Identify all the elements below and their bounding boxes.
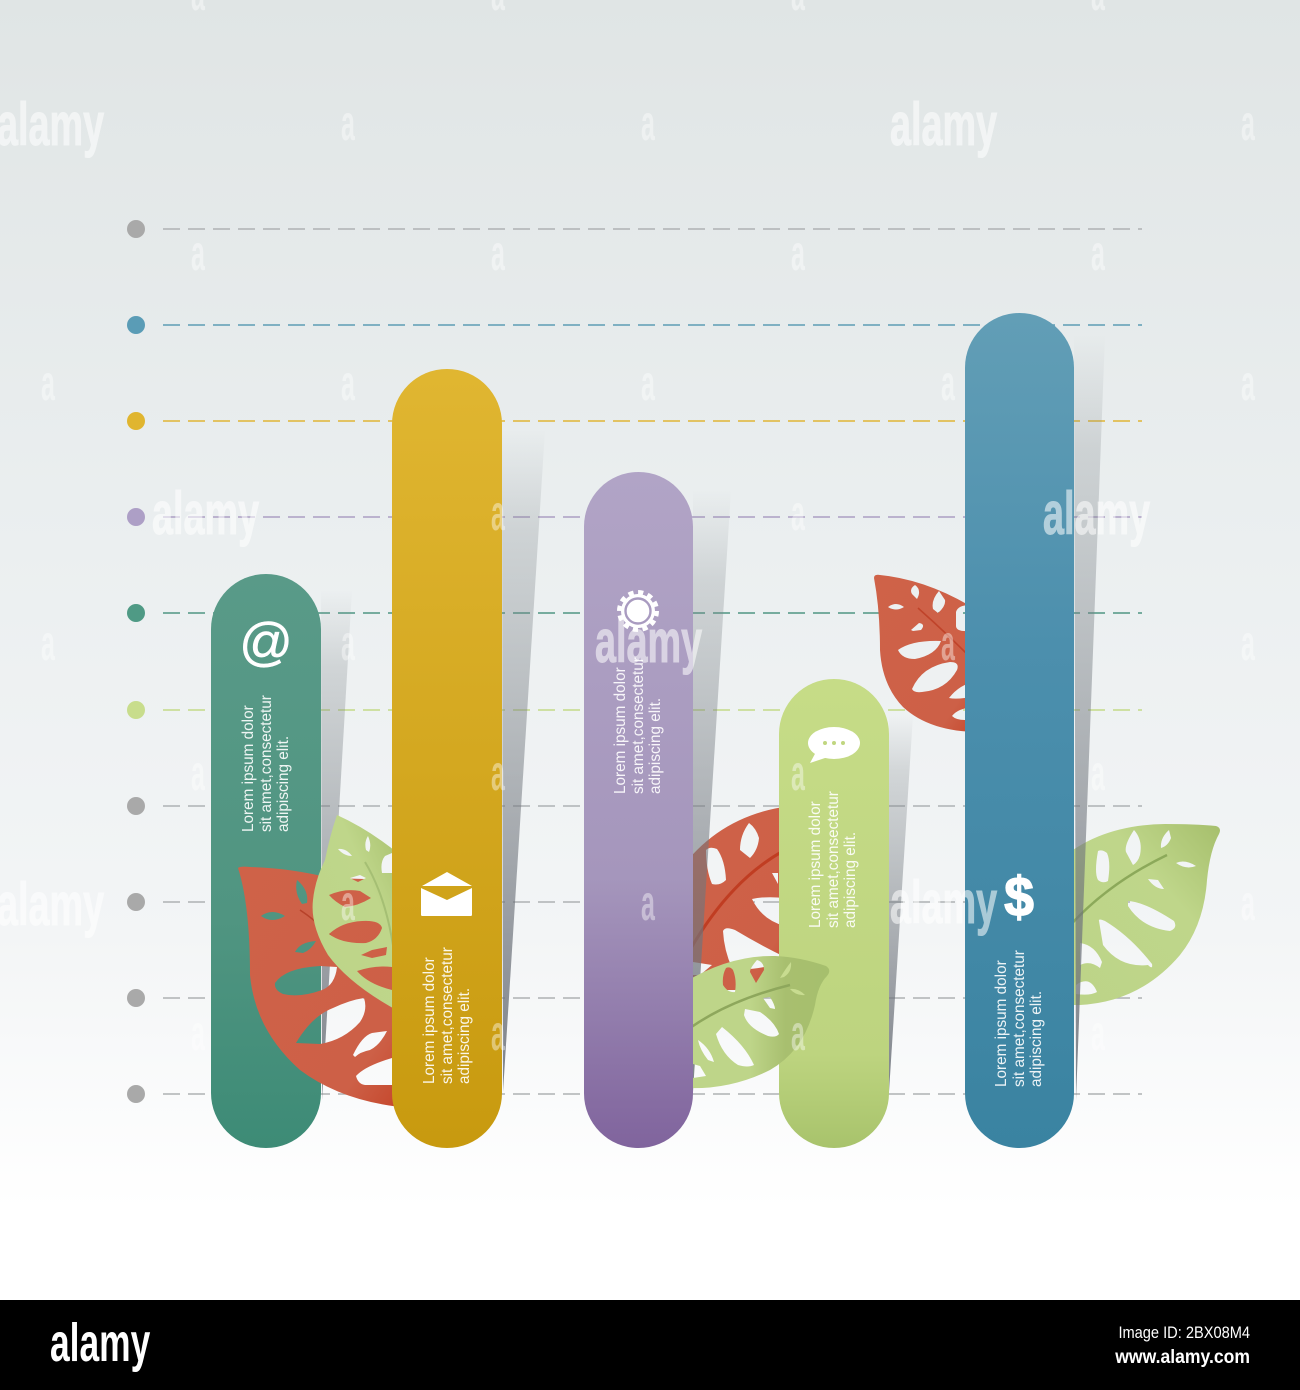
leaf: left red [238,867,400,1107]
text: yellow bar: adipiscing elit. [456,988,473,1084]
watermarks: alamy [152,480,259,547]
footer image id: Image ID: 2BX08M4 [1118,1324,1250,1342]
leaf: centre green [685,956,829,1088]
leaf: right green [1060,824,1220,1005]
leaf: top right red [874,575,980,732]
leaf: left green [313,815,400,1012]
watermarks: alamy [0,91,104,158]
text: yellow bar: sit amet,consectetur [439,947,456,1084]
watermarks: a [941,616,956,671]
text: teal bar [240,695,292,832]
watermarks: a [341,356,356,411]
watermarks: a [791,746,806,801]
watermarks: alamy [0,871,104,938]
bar: yellow [392,369,502,1148]
text: green bar: sit amet,consectetur [825,791,842,928]
text: yellow bar [421,947,473,1084]
watermarks: a [641,96,656,151]
text: teal bar: Lorem ipsum dolor [240,705,257,832]
text: blue bar [993,950,1045,1087]
watermarks: a [1091,746,1106,801]
text: green bar: adipiscing elit. [842,832,859,928]
watermarks: a [41,356,56,411]
text: teal bar: adipiscing elit. [275,736,292,832]
watermarks: a [1091,1006,1106,1061]
watermarks: a [341,876,356,931]
text: blue bar: adipiscing elit. [1028,991,1045,1087]
text: purple bar: Lorem ipsum dolor [612,667,629,794]
watermarks: a [491,486,506,541]
text: purple bar: adipiscing elit. [647,698,664,794]
text: blue bar: Lorem ipsum dolor [993,960,1010,1087]
shadow: yellow bar [502,430,545,1092]
text: green bar: Lorem ipsum dolor [807,801,824,928]
watermarks: a [791,226,806,281]
shadow: purple, green, blue bars [693,335,1105,1100]
watermarks: a [791,486,806,541]
text: yellow bar: Lorem ipsum dolor [421,957,438,1084]
watermarks: a [491,226,506,281]
watermarks [0,0,1256,1061]
bar: blue [965,313,1074,1148]
watermarks: alamy [890,91,997,158]
watermarks: a [1241,616,1256,671]
text: blue bar: sit amet,consectetur [1011,950,1028,1087]
watermarks: a [1241,356,1256,411]
text: green bar [807,791,859,928]
icon: speech bubble [808,727,860,763]
watermarks: a [1241,96,1256,151]
bar: purple [584,472,693,1148]
icon: gear [620,593,656,629]
watermarks: a [641,356,656,411]
watermarks: alamy [890,869,997,936]
icon: at sign: @ [239,613,293,672]
icon: envelope [421,872,472,916]
bar: light green [779,679,889,1148]
text: purple bar [612,657,664,794]
watermarks: a [341,616,356,671]
footer url: www.alamy.com [1114,1345,1250,1367]
watermarks: a [641,876,656,931]
watermarks: a [1241,876,1256,931]
watermarks: a [1091,226,1106,281]
watermarks: a [341,96,356,151]
teal bar shadow [321,590,352,1100]
footer logo: alamy [50,1312,151,1373]
footer bar [0,1300,1300,1390]
bar: teal [211,574,352,1148]
text: purple bar: sit amet,consectetur [630,657,647,794]
watermarks: a [41,616,56,671]
watermarks: a [491,746,506,801]
icon: dollar: $ [1004,866,1034,928]
watermarks: alamy [1043,480,1150,547]
watermarks: a [791,1006,806,1061]
text: teal bar: sit amet,consectetur [258,695,275,832]
watermarks: a [941,356,956,411]
watermarks: alamy [595,608,702,675]
watermarks: a [191,226,206,281]
watermarks: a [491,1006,506,1061]
gridlines and level dots [127,220,1142,1103]
leaf: centre red [680,806,790,990]
watermarks: a [191,746,206,801]
watermarks: a [191,1006,206,1061]
